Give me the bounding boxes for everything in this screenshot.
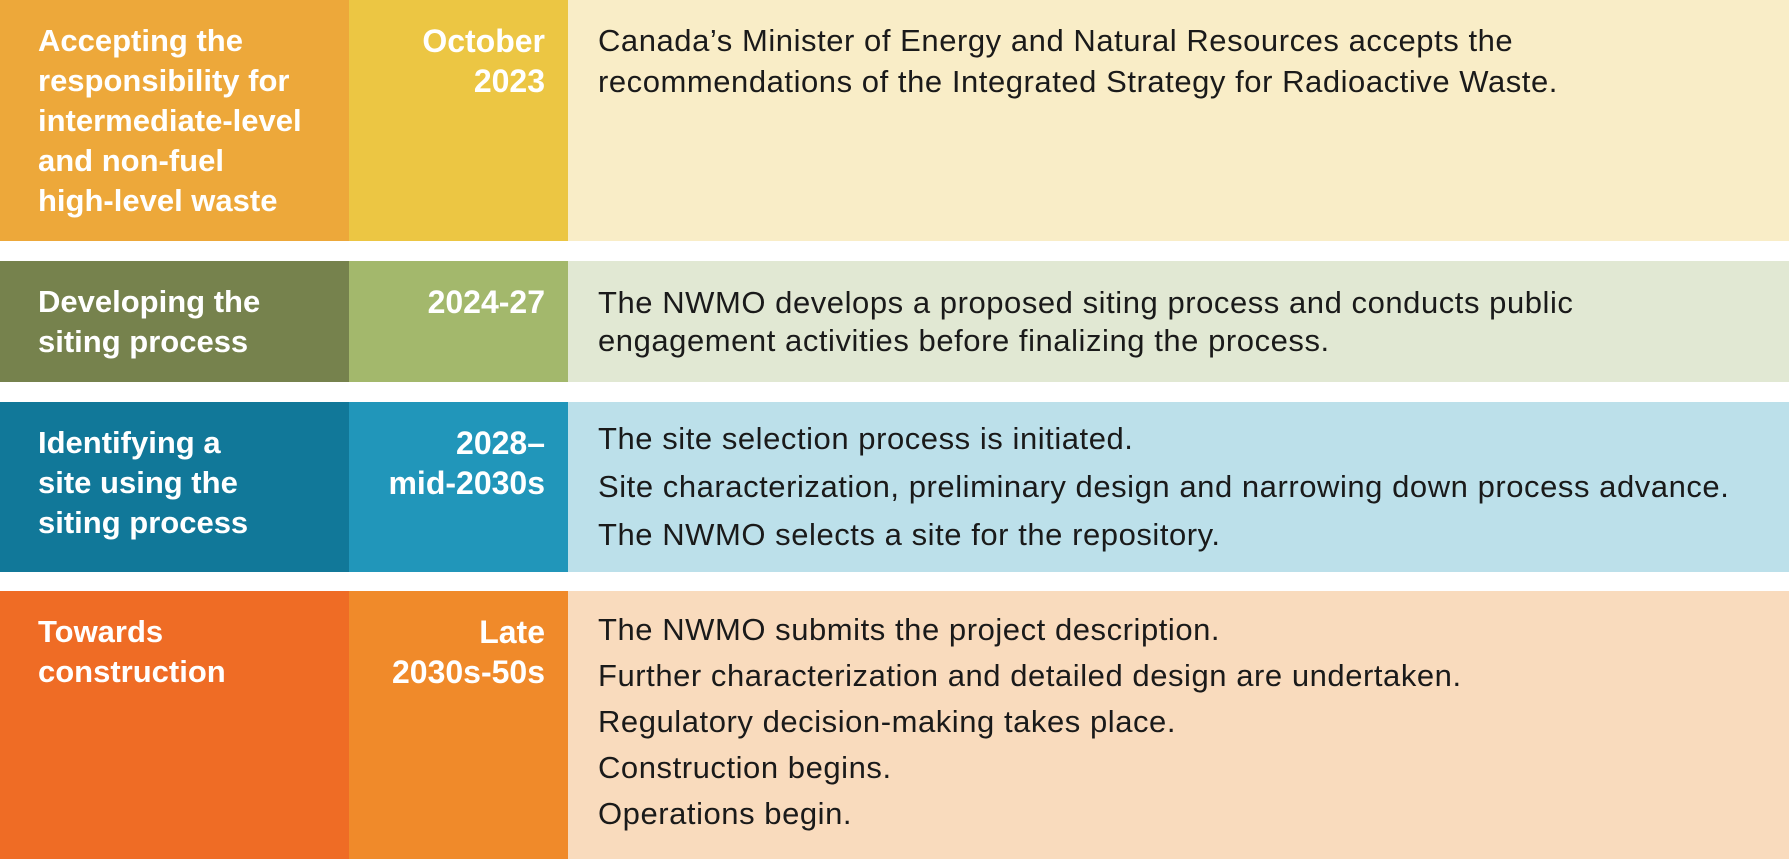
description 2: engagement activities before finalizing the process. — [598, 323, 1330, 358]
date 4 — [349, 591, 568, 859]
date 2 — [349, 261, 568, 382]
row 4: towards construction — [0, 591, 1789, 859]
title 3: Identifying a — [38, 425, 221, 460]
description 2: The NWMO develops a proposed siting process and conducts public — [598, 285, 1573, 320]
date 1: October — [422, 23, 545, 59]
date 3 — [349, 402, 568, 572]
title 1 — [0, 0, 349, 241]
title 2 — [0, 261, 349, 382]
description 4 — [568, 591, 1789, 859]
title 1: and non-fuel — [38, 143, 224, 178]
description 1: Canada’s Minister of Energy and Natural Resources accepts the — [598, 23, 1513, 58]
title 1: Accepting the — [38, 23, 243, 58]
description 3 — [568, 402, 1789, 572]
title 1: intermediate-level — [38, 103, 302, 138]
description 4: Construction begins. — [598, 750, 892, 785]
title 1: responsibility for — [38, 63, 289, 98]
description 1 — [568, 0, 1789, 241]
description 4: Operations begin. — [598, 796, 852, 831]
description 4: Regulatory decision-making takes place. — [598, 704, 1176, 739]
description 3: The NWMO selects a site for the repository. — [598, 517, 1221, 552]
date 4: 2030s-50s — [392, 654, 545, 690]
date 3: 2028– — [456, 425, 545, 461]
date 2: 2024-27 — [428, 284, 545, 320]
description 4: The NWMO submits the project description. — [598, 612, 1220, 647]
row 1: accepting responsibility — [0, 0, 1789, 241]
title 1: high-level waste — [38, 183, 277, 218]
date 1: 2023 — [474, 63, 545, 99]
description 1: recommendations of the Integrated Strategy for Radioactive Waste. — [598, 64, 1558, 99]
title 2: Developing the — [38, 284, 260, 319]
title 2: siting process — [38, 324, 248, 359]
title 4: Towards — [38, 614, 163, 649]
date 3: mid-2030s — [388, 465, 545, 501]
description 4: Further characterization and detailed design are undertaken. — [598, 658, 1462, 693]
date 4: Late — [479, 614, 545, 650]
description 3: The site selection process is initiated. — [598, 421, 1133, 456]
date 1 — [349, 0, 568, 241]
row 3: identifying a site — [0, 402, 1789, 572]
description 3: Site characterization, preliminary design and narrowing down process advance. — [598, 469, 1729, 504]
row 2: developing siting process — [0, 261, 1789, 382]
title 3: site using the — [38, 465, 238, 500]
description 2 — [568, 261, 1789, 382]
title 3 — [0, 402, 349, 572]
title 3: siting process — [38, 505, 248, 540]
title 4 — [0, 591, 349, 859]
title 4: construction — [38, 654, 226, 689]
